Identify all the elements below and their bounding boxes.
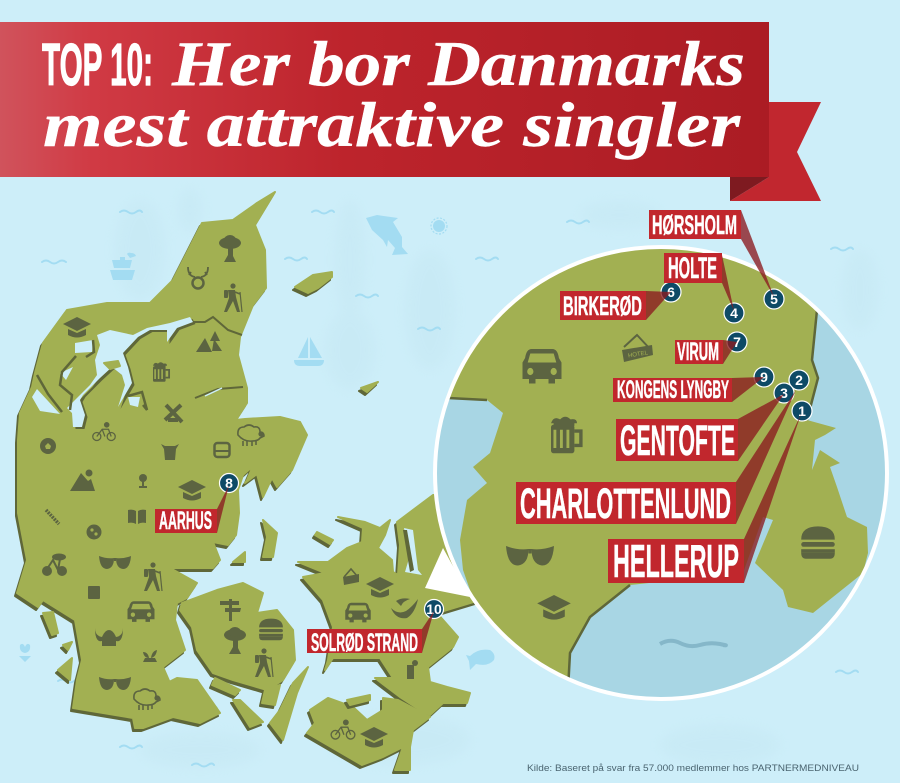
marker 1: 1 bbox=[798, 403, 806, 419]
marker 5 bbox=[764, 289, 784, 309]
icon: tree bbox=[219, 235, 241, 262]
land: Limfjord water bbox=[32, 317, 243, 429]
title banner bbox=[0, 22, 821, 201]
icon: viking helmet bbox=[95, 628, 123, 646]
icon: sunglasses bbox=[99, 677, 131, 690]
icon: burger bbox=[259, 619, 283, 640]
icon: signpost bbox=[220, 599, 241, 621]
icon: ship bbox=[110, 253, 136, 280]
icon: sailboat bbox=[294, 337, 324, 366]
icon: sheep bbox=[134, 689, 160, 710]
icon: wheat bbox=[46, 510, 59, 524]
map of Denmark bbox=[15, 192, 480, 773]
icon: flower bbox=[139, 474, 147, 488]
icon: football bbox=[40, 438, 56, 454]
marker 4 bbox=[724, 303, 744, 323]
icon: hiker bbox=[224, 283, 242, 312]
icon: palette bbox=[86, 524, 102, 540]
label: Hørsholm bbox=[649, 210, 774, 297]
icon: sun bbox=[433, 220, 445, 232]
icon: sprout bbox=[143, 650, 157, 662]
marker 9 bbox=[754, 367, 774, 387]
icon: antlers bbox=[188, 267, 208, 288]
icon: bikini bbox=[19, 644, 31, 662]
icon: mountain bbox=[70, 470, 95, 491]
label: Hørsholm: HØRSHOLM bbox=[652, 210, 737, 240]
ribbon tail bbox=[730, 102, 821, 201]
land icons bbox=[40, 235, 418, 748]
icon: fish bbox=[466, 650, 494, 670]
ribbon main bbox=[0, 22, 769, 177]
title line one: Her bor Danmarks bbox=[171, 29, 745, 99]
circle land bbox=[450, 249, 868, 678]
title line two: mest attraktive singler bbox=[43, 90, 741, 160]
icon: sunglasses bbox=[506, 546, 554, 566]
icon: windmill bbox=[165, 405, 182, 422]
marker 7 bbox=[727, 332, 747, 352]
icon: burger bbox=[801, 526, 835, 559]
icon: bike bbox=[331, 720, 355, 739]
land: Lolland and Falster bbox=[305, 698, 430, 773]
label: Aarhus: 8 bbox=[225, 475, 233, 491]
marker 7: 7 bbox=[733, 334, 741, 350]
land: small islands bbox=[41, 272, 378, 743]
icon: bus bbox=[214, 443, 230, 457]
label: Gentofte: GENTOFTE bbox=[620, 417, 735, 465]
numbered markers bbox=[661, 282, 812, 421]
icon: car bbox=[345, 603, 371, 622]
label: Solrød Strand: 10 bbox=[426, 601, 442, 617]
marker 9: 9 bbox=[760, 369, 768, 385]
label: Kongens Lyngby: KONGENS LYNGBY bbox=[617, 376, 729, 404]
zoom pointer bbox=[425, 548, 470, 597]
icon: hotel sign bbox=[622, 335, 653, 362]
marker 3: 3 bbox=[780, 385, 788, 401]
icon: book bbox=[128, 510, 146, 524]
marker 1 bbox=[792, 401, 812, 421]
circle icons bbox=[506, 335, 835, 620]
icon: graduation cap bbox=[360, 727, 388, 748]
seaweed texture bbox=[115, 188, 878, 768]
icon: graduation cap bbox=[537, 595, 571, 620]
icon: cow bbox=[161, 444, 179, 460]
marker 2 bbox=[789, 370, 809, 390]
decorative sea icons bbox=[19, 215, 494, 670]
label: Hellerup: HELLERUP bbox=[613, 535, 739, 587]
label: Solrød Strand bbox=[307, 600, 444, 657]
icon: sun rays bbox=[431, 218, 447, 234]
icon: graduation cap bbox=[366, 577, 394, 598]
title line one: TOP 10: bbox=[42, 32, 153, 98]
icon: beer bbox=[153, 362, 169, 382]
circle border bbox=[435, 247, 887, 699]
label: Hellerup bbox=[608, 414, 801, 587]
icon: hiker bbox=[255, 648, 273, 677]
icon: tree bbox=[224, 627, 246, 654]
waves bbox=[42, 210, 858, 766]
label: Virum: VIRUM bbox=[677, 338, 719, 366]
label: Aarhus bbox=[155, 474, 238, 535]
icon: bike bbox=[93, 423, 115, 441]
zoom circle: Copenhagen area bbox=[425, 240, 887, 720]
label: Aarhus: AARHUS bbox=[159, 507, 212, 535]
icon: mermaid bbox=[391, 598, 418, 618]
marker 4: 4 bbox=[730, 305, 738, 321]
marker 6: 6 bbox=[667, 284, 675, 300]
label: Kongens Lyngby bbox=[613, 376, 764, 404]
label: Birkerød: BIRKERØD bbox=[563, 291, 642, 321]
land: Funen bbox=[178, 583, 295, 693]
marker 5: 5 bbox=[770, 291, 778, 307]
label: Holte: HOLTE bbox=[668, 252, 717, 285]
label: Holte bbox=[664, 252, 734, 311]
label: Charlottenlund bbox=[516, 390, 796, 528]
icon: graduation cap bbox=[63, 317, 91, 338]
icon: couple bbox=[42, 554, 67, 576]
land: Zealand bbox=[296, 495, 480, 718]
icon: sunglasses bbox=[99, 556, 131, 569]
icon: hiker bbox=[144, 562, 162, 591]
marker 3 bbox=[774, 383, 794, 403]
icon: sheep bbox=[238, 425, 264, 446]
icon: car bbox=[128, 601, 154, 622]
icon: whale bbox=[366, 215, 408, 255]
marker 2: 2 bbox=[795, 372, 803, 388]
icon: hotel sign bbox=[343, 569, 359, 585]
icon: map bbox=[88, 586, 100, 599]
icon: tents bbox=[196, 331, 222, 352]
icon: car bbox=[522, 349, 562, 384]
icon: beer bbox=[551, 417, 581, 453]
source note: Kilde: Baseret på svar fra 57.000 medlemmer hos PARTNERMEDNIVEAU bbox=[527, 763, 859, 774]
label: Solrød Strand: SOLRØD STRAND bbox=[311, 629, 418, 657]
marker 6 bbox=[661, 282, 681, 302]
land: Jutland shadow and body bbox=[15, 192, 307, 731]
icon: drink bbox=[407, 660, 418, 679]
icon: hotel sign: HOTEL bbox=[628, 350, 649, 359]
label: Gentofte bbox=[616, 394, 784, 465]
icon: graduation cap bbox=[178, 480, 206, 500]
ribbon fold bbox=[730, 177, 769, 201]
